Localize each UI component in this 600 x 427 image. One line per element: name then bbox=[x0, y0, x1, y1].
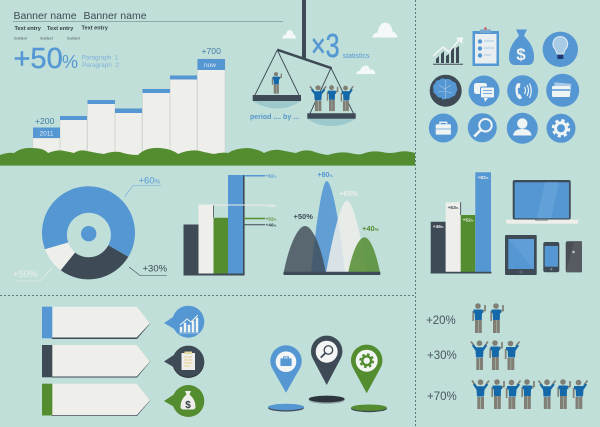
right bar chart: +63% bbox=[448, 205, 459, 211]
subtexts: Subtext bbox=[67, 36, 81, 40]
arrow panels bbox=[42, 307, 150, 416]
right bar chart bbox=[431, 172, 492, 274]
bubble: money bag bbox=[164, 385, 204, 417]
tablet bbox=[505, 235, 537, 275]
donut chart bbox=[13, 176, 168, 281]
text entries: Text entry bbox=[82, 26, 109, 32]
icon: user bbox=[507, 113, 538, 144]
subtexts: Subtext bbox=[40, 36, 54, 40]
icon: gear bbox=[546, 114, 576, 143]
step bar chart: +700 bbox=[202, 46, 221, 56]
people row: +20%: +20% bbox=[426, 315, 456, 327]
mountain chart: +80% bbox=[318, 172, 333, 179]
map pin: gear bbox=[351, 345, 382, 393]
step bar chart bbox=[33, 46, 225, 159]
paragraphs bbox=[82, 54, 119, 69]
heading: banner names: Banner name bbox=[14, 10, 77, 22]
mountain chart bbox=[284, 172, 380, 275]
person on left pan bbox=[272, 72, 281, 94]
statistic: +50%: +50 bbox=[14, 43, 63, 75]
mountain chart: +50% bbox=[294, 212, 313, 221]
people row: +30%: +30% bbox=[427, 350, 457, 362]
icon: magnifier bbox=[468, 113, 497, 142]
panel: dark bbox=[42, 345, 150, 378]
icon: money bag bbox=[509, 30, 534, 65]
bar chart with leaders bbox=[184, 174, 277, 276]
step bar chart: 2011 bbox=[40, 130, 54, 138]
pin disc: blue bbox=[268, 404, 304, 412]
donut chart: +30% bbox=[142, 264, 168, 274]
paragraphs: Paragraph 2 bbox=[82, 62, 119, 69]
panel: blue bbox=[42, 307, 150, 339]
icon: money bag: $ bbox=[516, 45, 526, 64]
bar chart with leaders: +82% bbox=[266, 174, 277, 180]
bubble: money bag: $ bbox=[185, 400, 191, 411]
bubble: chart bbox=[164, 306, 204, 338]
icon: briefcase bbox=[429, 114, 458, 142]
subtexts: Subtext bbox=[14, 36, 28, 40]
balance scale bbox=[253, 0, 356, 126]
step bar chart: +200 bbox=[35, 116, 55, 126]
people row: +30% bbox=[427, 340, 520, 370]
text entries: Text entry bbox=[14, 26, 42, 32]
section dividers bbox=[0, 0, 416, 427]
statistic: +50%: % bbox=[62, 52, 78, 72]
map pin: magnifier bbox=[311, 336, 342, 385]
phone back bbox=[566, 241, 582, 272]
donut chart: +60% bbox=[138, 176, 161, 186]
bar chart with leaders: +63% bbox=[266, 203, 277, 209]
bar chart with leaders: +46% bbox=[266, 222, 277, 228]
text entries bbox=[14, 26, 109, 32]
right bar chart: +82% bbox=[478, 175, 489, 181]
text entries: Text entry bbox=[47, 26, 74, 32]
mountain chart: +40% bbox=[362, 224, 379, 233]
pin disc: dark bbox=[309, 396, 345, 404]
period label: period .... by ... bbox=[250, 114, 299, 121]
people on right pan bbox=[310, 85, 353, 111]
map pin: briefcase bbox=[270, 345, 302, 393]
people row: +70%: +70% bbox=[427, 391, 457, 403]
people row: +70% bbox=[427, 379, 588, 409]
mountain chart: +65% bbox=[340, 191, 358, 198]
right bar chart: +52% bbox=[463, 218, 474, 224]
icon: clipboard bbox=[472, 27, 499, 66]
heading: banner names bbox=[13, 10, 283, 22]
heading: banner names: Banner name bbox=[84, 10, 147, 22]
phone bbox=[543, 242, 559, 272]
icon grid bbox=[429, 27, 579, 144]
icon: cards bbox=[546, 74, 579, 107]
clouds bbox=[282, 22, 398, 74]
panel: green bbox=[42, 384, 150, 416]
paragraphs: Paragraph 1 bbox=[82, 54, 119, 62]
bubble: clipboard bbox=[164, 346, 204, 378]
statistic: x3: ×3 bbox=[311, 28, 340, 65]
icon: growth chart bbox=[433, 37, 463, 64]
laptop bbox=[506, 180, 578, 224]
pin disc: green bbox=[351, 404, 387, 412]
donut chart: +50% bbox=[13, 269, 38, 280]
bar chart with leaders: +52% bbox=[266, 216, 277, 222]
grass strip bbox=[0, 148, 415, 166]
right bar chart: +46% bbox=[433, 224, 444, 230]
icon: light bulb bbox=[543, 32, 578, 67]
statistics label: statistics bbox=[343, 53, 370, 60]
subtexts bbox=[14, 36, 81, 40]
people row: +20% bbox=[426, 303, 503, 333]
icon: brain bbox=[430, 75, 462, 107]
step bar chart: now bbox=[204, 62, 216, 69]
icon: chat bbox=[468, 76, 500, 106]
icon: phone bbox=[507, 75, 538, 106]
